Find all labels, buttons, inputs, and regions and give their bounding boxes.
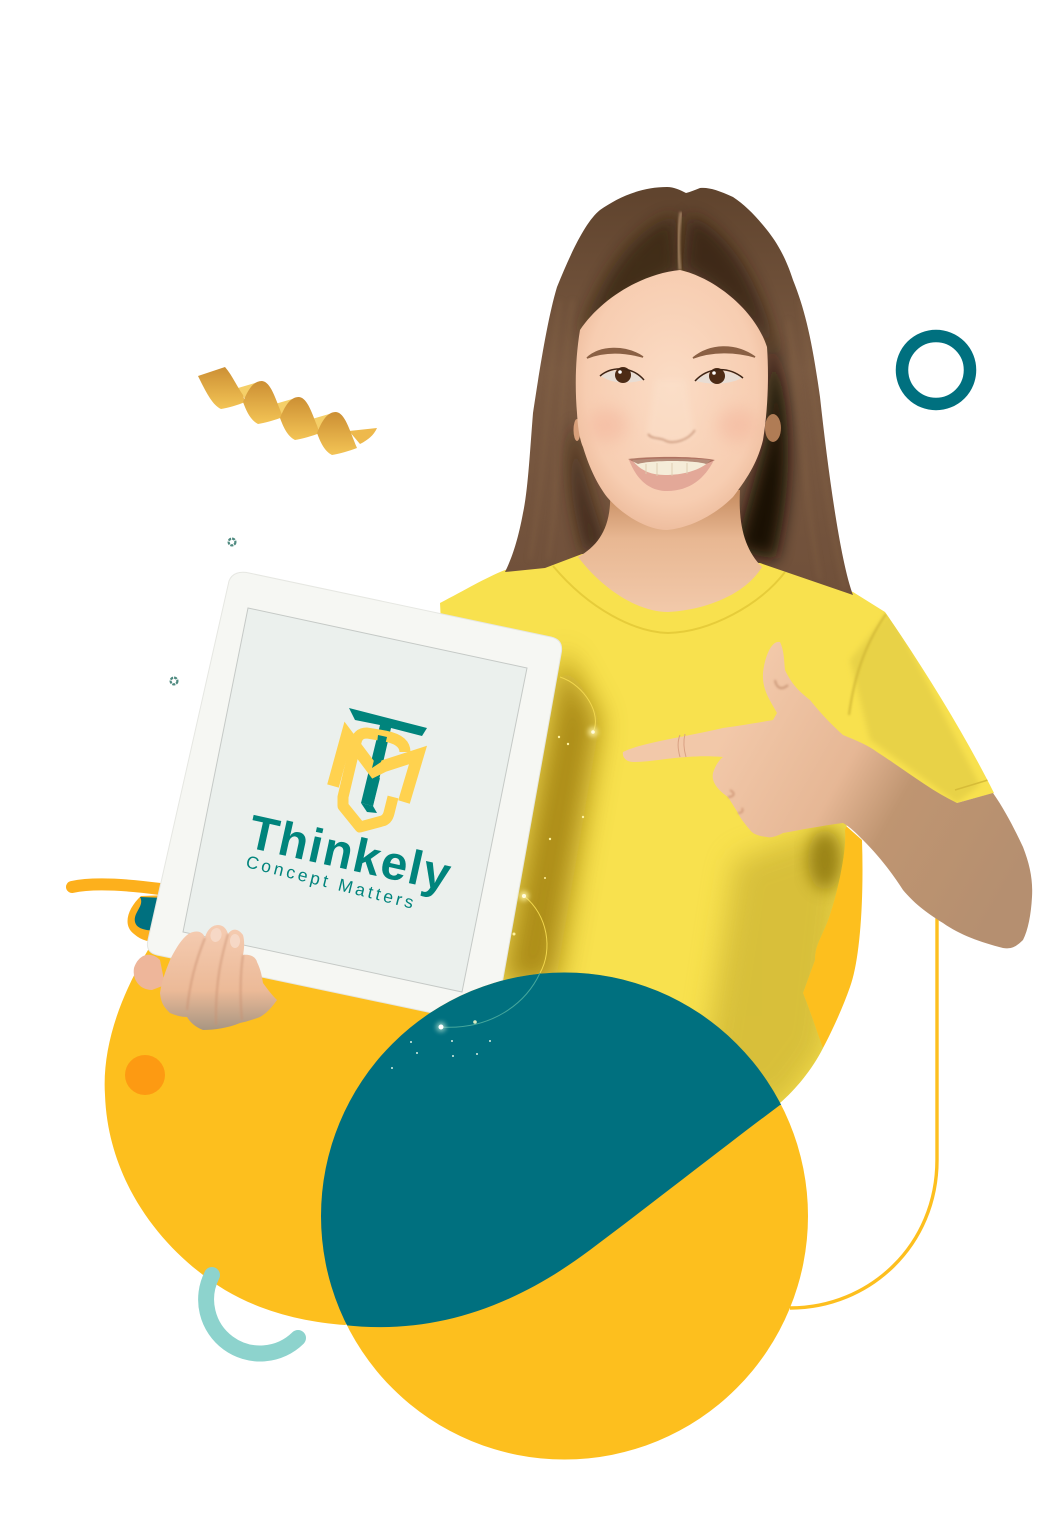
- sparkle arc lower with trail on teal: [391, 891, 547, 1069]
- logo mark: TCM monogram: [333, 708, 427, 827]
- gold ribbon squiggle: [198, 367, 377, 455]
- hand holding tablet: [134, 925, 277, 1030]
- nose: [647, 380, 695, 442]
- neck: [578, 490, 762, 612]
- decoration: orange swoosh with teal blob: [72, 884, 170, 942]
- logo tagline: Concept Matters: [244, 851, 416, 913]
- tablet screen: [183, 608, 527, 992]
- sparkle arc upper: [512, 677, 598, 936]
- left eye: [600, 367, 644, 383]
- logo wordmark: Thinkely: [244, 806, 456, 902]
- left eyebrow: [587, 348, 643, 358]
- shirt collar: [553, 566, 785, 633]
- small ring top: [229, 539, 235, 545]
- left ear: [574, 419, 580, 441]
- teal ring: [902, 336, 970, 404]
- yellow t-shirt: [440, 550, 994, 1110]
- right ear: [765, 414, 781, 442]
- pointing hand and arm: [623, 642, 1032, 948]
- long brown hair: [505, 187, 853, 595]
- right eye: [695, 368, 743, 384]
- cheek blush left: [588, 408, 628, 442]
- tablet: [147, 572, 562, 1024]
- teal part of circle: [321, 972, 782, 1328]
- right eyebrow: [693, 347, 755, 358]
- large yellow circle: [321, 972, 808, 1460]
- smile: [628, 457, 715, 491]
- thin yellow curve line: [790, 915, 937, 1308]
- teal arc decoration: [206, 1275, 298, 1354]
- cheek blush right: [717, 408, 757, 442]
- face: [576, 270, 768, 530]
- illustration: girl holding tablet with Thinkely logo: [66, 187, 1032, 1460]
- small ring bottom: [171, 678, 177, 684]
- yellow blob background: [105, 800, 863, 1325]
- orange dot: [125, 1055, 165, 1095]
